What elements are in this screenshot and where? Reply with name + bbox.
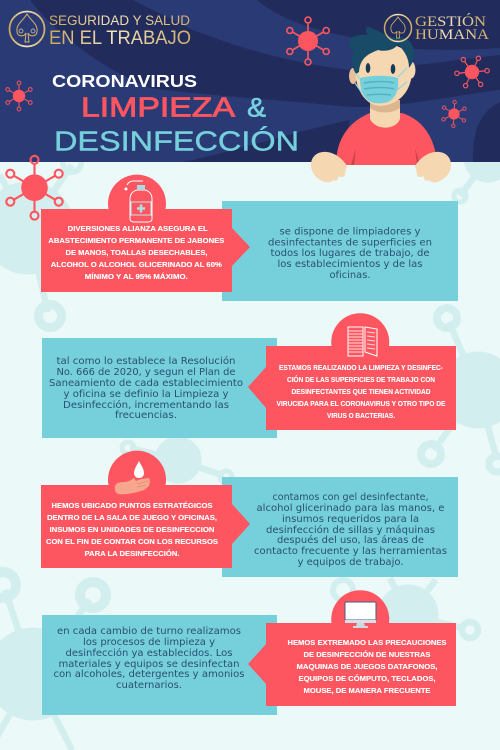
- title: LIMPIEZA: [81, 92, 235, 122]
- text block: row 3 teal: desinfección de sillas y máquinas: [266, 524, 435, 536]
- text block: row 2 red: VIRUS O BACTERIAS.: [327, 411, 395, 420]
- text block: row 3 teal: alcohol glicerinado para las manos, e: [256, 503, 445, 514]
- text block: row 3 red: CON EL FIN DE CONTAR CON LOS RECURSOS: [46, 537, 218, 546]
- panel: row 4 teal: [42, 615, 277, 715]
- text block: row 3 red: HEMOS UBICADO PUNTOS ESTRATÉGICOS: [52, 501, 213, 510]
- panel: row 3 teal: [222, 477, 458, 577]
- text block: row 1 teal: desinfectantes de superficies en: [268, 238, 432, 248]
- panel: row 2 red: [248, 313, 456, 430]
- logo: Gestión Humana: [384, 13, 490, 43]
- text block: row 1 red: DE MANOS, TOALLAS DESECHABLES,: [66, 248, 208, 257]
- illustration: hands: [311, 152, 451, 182]
- text block: row 1 red: MÍNIMO Y AL 95% MÁXIMO.: [85, 272, 188, 281]
- text block: row 2 teal: tal como lo establece la Resolución: [56, 355, 236, 367]
- text block: row 2 red: CIÓN DE LAS SUPERFICIES DE TRABAJO CON: [287, 375, 435, 384]
- icon: hand with drop: [115, 461, 150, 494]
- illustration: man with face mask: [336, 27, 437, 165]
- text block: row 3 teal: contamos con gel desinfectante,: [272, 492, 428, 503]
- title: &: [247, 92, 266, 122]
- panel: row 2 teal: [42, 338, 277, 438]
- text block: row 2 teal: y oficina se definio la Limpieza y: [64, 389, 229, 400]
- text block: row 1 red: ABASTECIMIENTO PERMANENTE DE JABONES: [48, 236, 225, 245]
- panel: row 1 red: [41, 175, 250, 292]
- text block: row 4 red: DE DESINFECCIÓN DE NUESTRAS: [304, 650, 431, 659]
- text block: row 1 teal: se dispone de limpiadores y: [280, 226, 421, 238]
- text block: row 4 red: MOUSE, DE MANERA FRECUENTE: [304, 686, 431, 695]
- title: CORONAVIRUS: [52, 71, 197, 91]
- text block: row 4 teal: materiales y equipos se desinfectan: [58, 659, 240, 670]
- panel: row 3 red: [41, 451, 250, 568]
- text block: row 2 teal: No. 666 de 2020, y segun el Plan de: [56, 367, 236, 378]
- icon: computer monitor: [345, 602, 376, 628]
- header background: [0, 0, 500, 162]
- text block: row 4 teal: desinfección ya establecidos. Los: [66, 647, 233, 659]
- text block: row 2 red: ESTAMOS REALIZANDO LA LIMPIEZA Y DESINFEC-: [279, 363, 444, 372]
- panel: row 1 teal: [222, 201, 458, 301]
- text block: row 2 teal: Saneamiento de cada establecimiento: [49, 378, 243, 389]
- text block: row 3 red: INSUMOS EN UNIDADES DE DESINFECCION: [50, 525, 214, 534]
- text block: row 2 red: DESINFECTANTES QUE TIENEN ACTIVIDAD: [292, 387, 430, 396]
- panel: row 4 red: [248, 590, 456, 706]
- logo: Gestión Humana: GESTIÓN: [415, 13, 487, 30]
- logo: Gestión Humana: HUMANA: [415, 27, 490, 43]
- text block: row 4 red: EQUIPOS DE CÓMPUTO, TECLADOS,: [298, 674, 436, 683]
- text block: row 1 red: ALCOHOL O ALCOHOL GLICERINADO AL 60%: [51, 260, 222, 269]
- text block: row 3 teal: y equipos de trabajo.: [298, 557, 404, 568]
- title: [52, 71, 299, 157]
- text block: row 2 red: VIRUCIDA PARA EL CORONAVIRUS Y OTRO TIPO DE: [276, 399, 446, 408]
- text block: row 3 teal: contacto frecuente y las herramientas: [254, 546, 447, 557]
- icon: open door: [348, 327, 377, 356]
- text block: row 1 red: DIVERSIONES ALIANZA ASEGURA EL: [68, 224, 208, 233]
- logo: Seguridad y Salud en el Trabajo: SEGURIDAD Y SALUD: [49, 13, 190, 28]
- text block: row 4 teal: con alcoholes, detergentes y amonios: [54, 669, 244, 680]
- text block: row 4 red: HEMOS EXTREMADO LAS PRECAUCIONES: [288, 638, 447, 647]
- text block: row 2 teal: frecuencias.: [115, 410, 177, 421]
- text block: row 4 teal: cuaternarios.: [116, 680, 182, 691]
- text block: row 1 teal: oficinas.: [330, 270, 370, 281]
- text block: row 3 teal: insumos requeridos para la: [282, 514, 419, 525]
- icon: soap bottle: [124, 181, 152, 222]
- logo: Seguridad y Salud en el Trabajo: [10, 12, 191, 49]
- text block: row 3 red: DENTRO DE LA SALA DE JUEGO Y OFICINAS,: [47, 513, 217, 522]
- title: DESINFECCIÓN: [54, 126, 299, 157]
- text block: row 4 red: MAQUINAS DE JUEGOS DATAFONOS,: [296, 662, 438, 671]
- text block: row 1 teal: los establecimientos y de las: [278, 259, 422, 270]
- icons: header viruses: [6, 17, 493, 128]
- text block: row 3 teal: después del uso, las áreas de: [277, 534, 424, 546]
- text block: row 3 red: PARA LA DESINFECCIÓN.: [84, 549, 180, 558]
- logo: Seguridad y Salud en el Trabajo: EN EL TRABAJO: [49, 28, 191, 49]
- icon: red virus: [6, 156, 63, 220]
- text block: row 4 teal: los procesos de limpieza y: [83, 637, 215, 648]
- text block: row 1 teal: todos los lugares de trabajo, de: [270, 248, 430, 259]
- text block: row 2 teal: Desinfección, incrementando las: [63, 399, 229, 411]
- text block: row 4 teal: en cada cambio de turno realizamos: [57, 626, 241, 637]
